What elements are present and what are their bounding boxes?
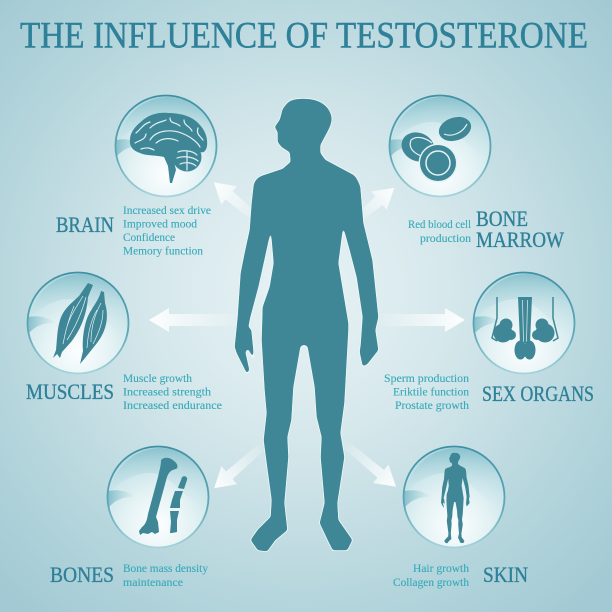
- text: brain effects: Confidence: [123, 230, 175, 244]
- panel: bones: [107, 446, 208, 548]
- text: sex organs effects: Eriktile function: [393, 384, 469, 398]
- label: skin: SKIN: [483, 562, 528, 587]
- sphere: bone marrow: [389, 96, 490, 196]
- arrow: to bone marrow: [348, 179, 402, 229]
- arrow: to bones: [206, 436, 272, 497]
- central human silhouette: [235, 99, 378, 551]
- panel: sex organs: [473, 272, 574, 374]
- text: sex organs effects: Sperm production: [384, 371, 469, 385]
- arrow: to skin: [336, 434, 404, 496]
- text: skin effects: Hair growth: [413, 561, 469, 575]
- sphere: bones: [107, 446, 208, 548]
- arrow: to muscles: [149, 308, 237, 332]
- label: bone marrow: BONE: [476, 206, 528, 231]
- text: bone marrow effects: Red blood cell: [408, 217, 472, 231]
- arrow: to brain: [206, 173, 266, 229]
- icon: sex organs: [492, 297, 558, 360]
- brain folds: [135, 118, 203, 170]
- label: muscles: MUSCLES: [26, 379, 114, 404]
- text: brain effects: Improved mood: [123, 216, 197, 230]
- text: bone marrow effects: [408, 217, 472, 245]
- text: muscles effects: Increased endurance: [123, 398, 222, 412]
- text: brain effects: [123, 203, 211, 258]
- sphere: skin: [403, 446, 504, 548]
- text: bones effects: Bone mass density: [123, 561, 208, 575]
- label: bone marrow: MARROW: [476, 227, 564, 252]
- icon: small human figure: [441, 453, 470, 543]
- text: bone marrow effects: production: [420, 231, 471, 245]
- panel: bone marrow: [389, 96, 490, 196]
- panel: brain: [115, 96, 216, 196]
- sphere: muscles: [27, 272, 128, 374]
- text: muscles effects: [123, 371, 222, 412]
- text: sex organs effects: [384, 371, 469, 412]
- text: brain effects: Increased sex drive: [123, 203, 211, 217]
- icon: muscles: [53, 283, 107, 364]
- sphere: sex organs: [473, 272, 574, 374]
- panel: muscles: [27, 272, 128, 374]
- text: bones effects: [123, 561, 208, 589]
- label: brain: BRAIN: [56, 212, 114, 237]
- arrow: to sex organs: [378, 308, 465, 332]
- text: sex organs effects: Prostate growth: [395, 398, 469, 412]
- panel: skin: [403, 446, 504, 548]
- icon: femur bone: [139, 458, 177, 535]
- sphere: brain: [115, 96, 216, 196]
- label: bones: BONES: [50, 562, 114, 587]
- text: brain effects: Memory function: [123, 244, 203, 258]
- icon: red blood cells: [397, 113, 474, 182]
- text: muscles effects: Muscle growth: [123, 371, 192, 385]
- label: bone marrow: [476, 206, 564, 252]
- text: muscles effects: Increased strength: [123, 384, 211, 398]
- text: skin effects: [393, 561, 469, 589]
- text: bones effects: maintenance: [123, 575, 183, 589]
- icon: brain: [130, 113, 207, 183]
- icon: finger bones: [170, 476, 187, 533]
- text: skin effects: Collagen growth: [393, 575, 469, 589]
